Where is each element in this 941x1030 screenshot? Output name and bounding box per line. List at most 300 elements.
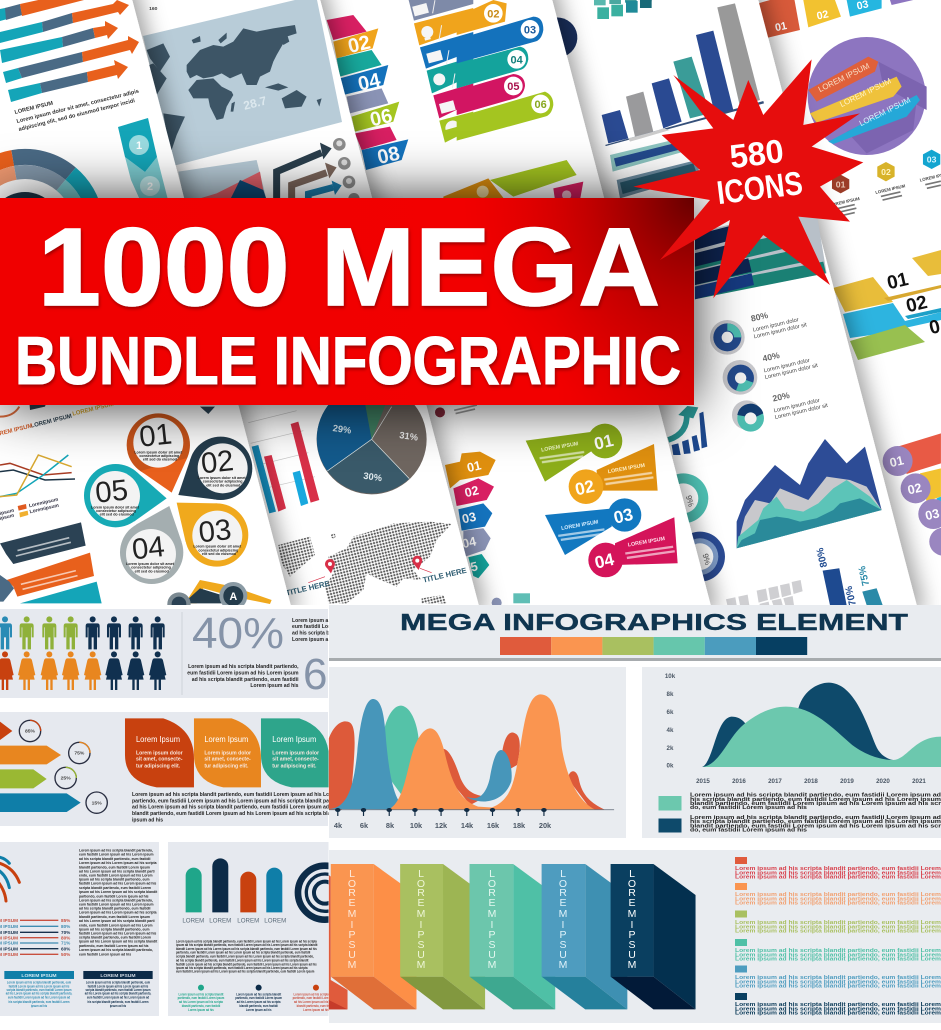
axis labels: 16k	[487, 821, 500, 830]
leaf cards: Lorem Ipsum	[272, 734, 316, 744]
paragraph: Lorem ipsum ad his scripta blandit partiendo, eum fastidii Lorem ipsum ad his Lorem	[132, 792, 339, 798]
wide paragraph: ad his scripta blandit partiendo, eum fastidii Lorem ipsum ad his Lorem ipsum ad his scripta blandit	[176, 958, 309, 962]
column labels: LOREM IPSUM	[417, 868, 425, 971]
three notes: Lorem ipsum ad his	[246, 1008, 272, 1012]
navy column: fastidii Lorem ipsum ad his Lorem ipsum ad his	[88, 984, 148, 988]
arcs	[0, 857, 19, 901]
three notes: blandit partiendo, eum fastidii	[297, 1004, 335, 1008]
blue column: scripta blandit partiendo, eum fastidii Lorem ipsum	[6, 988, 72, 992]
legend text: Lorem ipsum ad his scripta blandit partiendo, eum fastidii Lorem	[735, 870, 941, 876]
ribbons 01-05: 04	[461, 534, 478, 551]
leaf cards: tur adipiscing elit.	[204, 763, 249, 769]
arrows caption: LOREM IPSUM	[14, 100, 54, 116]
dotted world map	[278, 522, 468, 603]
column text: eum fastidii Lorem ipsum ad his Lorem ipsum	[79, 902, 154, 907]
panel: arrows and leaf cards	[0, 712, 355, 826]
pointer banners 01-04: LOREM IPSUM	[561, 519, 599, 532]
legend text	[735, 866, 941, 1017]
pin 01: consectetur adipiscing	[139, 454, 179, 458]
rounded pill list 02-06	[457, 0, 553, 141]
40 percent: 40%	[192, 609, 284, 658]
legend text: Lorem ipsum ad his scripta blandit partiendo, eum fastidii Lorem	[735, 929, 941, 935]
pin 02: 02	[199, 444, 235, 480]
legend text: his scripta blandit partiendo, eum fastidii Lorem ipsum ad his Lorem ipsum	[690, 797, 941, 803]
pie chart	[317, 384, 427, 494]
legend text: blandit partiendo, eum fastidii Lorem ipsum ad his Lorem ipsum ad his scr	[690, 801, 941, 807]
column text: ipsum ad his scripta blandit partiendo, eum	[79, 877, 150, 882]
three notes: ad his Lorem ipsum ad his scripta	[294, 1000, 338, 1004]
column text: blandit partiendo, eum fastidii Lorem ipsum	[79, 865, 150, 869]
legend text: his scripta blandit partiendo, eum fastidii Lorem ipsum ad his Lorem ipsum	[690, 819, 941, 825]
wide paragraph: partiendo, eum fastidii Lorem ipsum ad his Lorem ipsum ad his scripta blandit partiendo, eum fastidii	[176, 950, 310, 955]
numbered purple circles with bars: 01	[888, 453, 905, 470]
wide paragraph: ipsum ad his scripta blandit partiendo, eum fastidii Lorem ipsum ad his Lorem ipsum ad his scripta blandit	[176, 943, 318, 947]
pin 03: consectetur adipiscing	[198, 548, 238, 552]
pie chart: 29%	[332, 423, 353, 436]
second percentage text: Lorem ipsum ad his	[250, 683, 299, 689]
column text: ad his scripta blandit partiendo, eum fastidii	[79, 906, 150, 911]
leaf cards: Lorem Ipsum	[204, 734, 248, 744]
pin 03	[177, 503, 248, 567]
panel: overlapping distribution chart	[329, 667, 626, 838]
arrows caption: adipiscing elit, sed do eiusmod tempor incidi	[18, 98, 136, 133]
rounded bars: LOREM	[209, 918, 231, 925]
segmented half ring	[0, 148, 98, 198]
pie chart: 30%	[363, 471, 383, 483]
paragraph: ipsum ad his	[132, 818, 163, 824]
paragraph	[132, 792, 355, 824]
pin 05	[84, 464, 167, 527]
legend text: Lorem ipsum ad his scripta blandit partiendo, eum fastidii Lorem	[735, 975, 941, 981]
page A: arrows, line chart and pins sheet	[0, 0, 292, 616]
percentage lines: 85%	[61, 918, 71, 923]
navy column: ad his Lorem ipsum ad his scripta blandit partiendo,	[85, 991, 151, 996]
purple circle with 3D arrows	[808, 37, 927, 155]
numbered purple circles with bars: 03	[924, 506, 941, 523]
pin 03: elit sed do eiusmod	[202, 552, 236, 556]
panel: rounded bars and concentric rings	[168, 842, 352, 1016]
ribbons 01-05: 05	[462, 559, 479, 576]
teal squares	[594, 0, 652, 19]
column labels: LOREM IPSUM	[348, 868, 356, 971]
navy column: his scripta blandit partiendo, eum fastidii Lorem	[87, 1000, 149, 1004]
donut percentages list: Lorem ipsum dolor sit	[753, 322, 808, 340]
column text: Lorem ipsum ad his scripta blandit partiendo,	[79, 948, 153, 952]
second percentage: 6	[303, 650, 327, 699]
ribbons 01-05: 01	[466, 458, 483, 475]
navy column	[83, 971, 153, 1008]
numbered top boxes: 02	[816, 8, 830, 22]
lower line chart: Loremipsum	[28, 497, 59, 509]
three notes: Lorem ipsum ad his	[188, 1008, 214, 1012]
zig-zag ribbons 02 04 06 08: 04	[356, 69, 383, 96]
legend text: Lorem ipsum ad his scripta blandit partiendo, eum fastidii Lorem	[735, 979, 941, 985]
purple circle with 3D arrows: LOREM IPSUM	[858, 95, 912, 128]
three notes: Lorem ipsum ad his	[303, 1008, 329, 1012]
panel: people icons and percentages	[0, 609, 354, 699]
legend swatches	[658, 796, 682, 832]
second percentage text: ad his scripta blandit partiendo, eum fastidii	[192, 677, 299, 683]
column text: endo, eum fastidii Lorem ipsum ad his Lorem	[79, 873, 153, 878]
legend text: Lorem ipsum ad his scripta blandit partiendo, eum fastidii Lorem	[735, 1011, 941, 1017]
rounded pill list 02-06: 06	[535, 99, 547, 111]
wide paragraph: ipsum ad his scripta blandit partiendo, eum fastidii Lorem ipsum ad his Lorem ipsum ad his scripta	[176, 966, 308, 970]
legend text: Lorem ipsum ad his scripta blandit partiendo, eum fastidii Lorem	[735, 948, 941, 954]
legend text: Lorem ipsum ad his scripta blandit partiendo, eum fastidii Lorem	[735, 866, 941, 872]
percentage lines: 50%	[61, 952, 71, 957]
leaf cards: tur adipiscing elit.	[136, 763, 181, 769]
wide paragraph	[176, 939, 318, 974]
stacked horizontal bars	[694, 216, 826, 300]
teal step ribbon: 2	[147, 181, 153, 193]
legend text: Lorem ipsum ad his scripta blandit partiendo, eum fastidii Lorem	[735, 875, 941, 881]
numbered top boxes: 01	[774, 20, 788, 34]
layered area chart	[737, 439, 882, 548]
donut percentages list: Lorem ipsum dolor	[773, 398, 821, 414]
starburst badge	[633, 59, 863, 298]
blue column: ipsum ad his	[31, 1004, 47, 1008]
page C: numbered ribbons and pointer banners	[0, 0, 712, 610]
wide paragraph: scripta blandit partiendo, eum fastidii Lorem ipsum ad his Lorem ipsum ad his scripta blandit partiendo,	[176, 954, 314, 959]
left-side arrow chart and rings (cut by neighbour page)	[658, 406, 725, 582]
axis labels: 12k	[435, 821, 448, 830]
teal step ribbon: 1	[136, 140, 142, 152]
pointer banners 01-04: 01	[592, 430, 616, 454]
hexagon badges: 01	[836, 179, 846, 189]
donut percentages list: 20%	[771, 390, 791, 404]
numbered purple circles with bars	[883, 433, 941, 556]
leaf cards: Lorem ipsum dolor	[136, 750, 183, 756]
three notes: Lorem ipsum ad his scripta blandit	[294, 992, 339, 996]
legend text: Lorem ipsum ad his scripta blandit partiendo, eum fastidii Lorem	[735, 901, 941, 907]
leaf cards: sit amet, consecte-	[136, 757, 183, 763]
pin 01: elit sed do eiusmod	[143, 458, 177, 462]
lower line chart	[0, 402, 114, 522]
three notes: blandit partiendo, eum fastidii	[182, 1004, 220, 1008]
y axis labels	[665, 673, 676, 770]
navy half circle	[556, 18, 578, 56]
leaf cards	[125, 718, 329, 787]
pin 03: Lorem ipsum dolor sit amet	[193, 545, 242, 549]
hexagon badges: 03	[927, 155, 937, 165]
map value: 28.7	[242, 93, 268, 113]
percentage lines: 80%	[61, 935, 71, 940]
pointer banners 01-04	[492, 424, 678, 608]
photo collage of tilted infographic pages	[0, 0, 941, 616]
numbered stacked steps 01 02 0: 02	[904, 292, 929, 317]
second percentage text	[187, 664, 299, 689]
legend text: Lorem ipsum ad his scripta blandit partiendo, eum fastidii Lorem	[735, 984, 941, 990]
zig-zag ribbons 02 04 06 08	[327, 15, 408, 170]
axis labels: 20k	[539, 821, 552, 830]
rounded pill list 02-06: 04	[511, 54, 524, 66]
left-side arrow chart and rings (cut by neighbour page): 9%	[684, 494, 696, 508]
rounded bars: LOREM	[264, 918, 286, 925]
axis	[329, 808, 614, 816]
pin 02	[178, 437, 252, 500]
pointer banners 01-04: LOREM IPSUM	[541, 441, 579, 454]
lower line chart: LOREM IPSUM	[30, 414, 73, 430]
navy column: eum fastidii Lorem ipsum ad his Lorem ipsum ad	[87, 995, 149, 999]
column text: eum fastidii Lorem ipsum ad his	[79, 952, 131, 956]
banner headline: 1000 MEGA	[38, 206, 660, 329]
axis labels: 6k	[360, 821, 369, 830]
percentage bars and grid: 75%	[857, 565, 872, 587]
pointer banners 01-04: LOREM IPSUM	[607, 463, 646, 475]
banner subheading: BUNDLE INFOGRAPHIC	[15, 323, 681, 399]
pin 02: consectetur adipiscing	[203, 480, 243, 484]
axis labels: 14k	[461, 821, 474, 830]
navy column: Lorem ipsum ad his scripta blandit partiendo, eum	[86, 980, 150, 985]
40 percent text: ad his scripta blandit	[292, 630, 343, 636]
rounded bars: LOREM	[182, 918, 204, 925]
three notes: Lorem ipsum ad his scripta blandit	[236, 992, 282, 996]
arrows: 15%	[92, 800, 102, 806]
x axis labels: 2015	[696, 778, 710, 785]
pin 05: elit sed do eiusmod	[100, 513, 134, 517]
zig-zag ribbons 02 04 06 08: 02	[346, 32, 373, 58]
40 percent text: Lorem ipsum ad his	[292, 637, 340, 643]
bent arrows	[277, 138, 360, 204]
x axis labels: 2020	[876, 778, 890, 785]
left-side arrow chart and rings (cut by neighbour page): 9%	[701, 553, 712, 566]
blue column	[4, 971, 74, 1008]
y axis labels: 10k	[665, 673, 676, 680]
three notes: partiendo, eum fastidii Lorem ipsum	[293, 996, 339, 1000]
three notes	[178, 985, 339, 1012]
donut percentages list: Lorem ipsum dolor sit	[774, 403, 829, 421]
three notes: Lorem ipsum ad his scripta blandit	[179, 992, 224, 996]
column text: Lorem ipsum ad his Lorem ipsum ad his scripta	[79, 861, 157, 865]
navy column: LOREM IPSUM	[100, 973, 136, 979]
donut percentages list	[710, 310, 829, 432]
area curves	[702, 683, 941, 767]
page B: world map sheet, pie and dotted map	[143, 0, 496, 605]
column text: ad his Lorem ipsum ad his scripta blandit parti	[79, 919, 155, 923]
arrows: 85%	[25, 729, 36, 735]
top small labels: 160	[149, 6, 158, 12]
pin 04: 04	[130, 530, 166, 566]
percentage lines: 70%	[61, 930, 71, 935]
column text: endo, eum fastidii Lorem ipsum ad his Lorem	[79, 923, 153, 927]
colour strip	[500, 637, 807, 655]
40 percent text	[292, 618, 354, 643]
leaf cards: sit amet, consecte-	[272, 757, 319, 763]
wide paragraph: blandit Lorem ipsum ad his Lorem ipsum ad his scripta blandit partiendo, eum fastidii Lorem ipsum ad his	[176, 947, 317, 951]
legend text: Lorem ipsum ad his scripta blandit partiendo, eum fastidii Lorem	[735, 892, 941, 898]
three notes: blandit partiendo, eum fastidii	[239, 1004, 278, 1008]
donut percentages list: Lorem ipsum dolor	[752, 317, 800, 334]
header panel: mega infographics element	[329, 605, 941, 661]
three notes: partiendo, eum fastidii Lorem ipsum	[178, 996, 224, 1000]
legend text: do, eum fastidii Lorem ipsum ad his	[690, 805, 807, 811]
column text: Lorem ipsum ad his Lorem ipsum ad his scripta	[79, 910, 157, 915]
zig-zag ribbons 02 04 06 08: 06	[368, 105, 395, 131]
column text: ipsum ad his Lorem ipsum ad his scripta blandit	[79, 939, 158, 944]
pointer banners 01-04: 02	[573, 476, 596, 499]
column text	[79, 848, 158, 956]
column text: scripta blandit partiendo, eum fastidii Lorem	[79, 886, 152, 890]
pin 04: Lorem ipsum dolor sit amet	[126, 562, 175, 566]
column text: partiendo, eum fastidii Lorem ipsum ad his	[79, 944, 149, 948]
page E: far right sheet	[758, 0, 941, 556]
wide paragraph: Lorem ipsum ad his scripta blandit partiendo, eum fastidii Lorem ipsum ad his Lorem ipsum ad his scripta	[176, 939, 317, 943]
paragraph: blandit partiendo, eum fastidii Lorem ipsum ad his Lorem ipsum ad his scripta blandit	[132, 811, 340, 817]
legend text: Lorem ipsum ad his scripta blandit partiendo, eum fastidii Lorem	[735, 952, 941, 958]
column text: eum fastidii Lorem ipsum ad his Lorem ipsum	[79, 852, 154, 857]
y axis labels: 6k	[667, 709, 674, 716]
chevron ribbons	[0, 522, 102, 603]
rounded pill list 02-06: 05	[507, 81, 519, 93]
donut percentages list: Lorem ipsum dolor sit	[764, 363, 819, 381]
red banner	[0, 198, 694, 405]
hexagon badges	[829, 150, 941, 217]
blue column: ad his Lorem ipsum ad his scripta blandit partiendo,	[6, 991, 72, 996]
panel: two series area chart	[642, 667, 941, 838]
percentage lines: 80%	[61, 924, 71, 929]
column text: fastidii Lorem ipsum ad his Lorem ipsum ad his	[79, 881, 156, 886]
lower line chart: LOREM IPSUM	[72, 402, 114, 418]
legend text: Lorem ipsum ad his scripta blandit partiendo, eum fastidii Lorem	[735, 924, 941, 930]
y axis labels: 4k	[667, 727, 674, 734]
donut percentages list: 40%	[762, 350, 781, 364]
legend text: Lorem ipsum ad his scripta blandit partiendo, eum fastidii Lorem	[735, 957, 941, 963]
panel: arcs and percentage lines	[0, 842, 159, 1016]
x axis labels: 2017	[768, 778, 782, 785]
legend text: Lorem ipsum ad his scripta blandit partiendo, eum fastidii Lorem	[735, 1002, 941, 1008]
tilted label tabs above banner	[443, 160, 583, 200]
leaf cards: tur adipiscing elit.	[272, 763, 317, 769]
rounded pill list 02-06: 02	[487, 8, 499, 20]
numbered purple circles with bars: 02	[906, 481, 923, 497]
ribbons 01-05: 02	[463, 483, 480, 500]
percentage bars and grid: 70%	[844, 585, 859, 607]
numbered drop pins 01-05	[84, 407, 252, 584]
pin 02: Lorem ipsum dolor sit amet	[198, 476, 246, 480]
world map	[145, 25, 322, 155]
legend text: Lorem ipsum ad his scripta blandit partiendo, eum fastidii Lorem	[735, 920, 941, 926]
lower bar chart	[248, 411, 319, 513]
legend text: Lorem ipsum ad his scripta blandit partiendo, eum fastidii Lorem ipsum ad	[690, 792, 941, 798]
legend text: do, eum fastidii Lorem ipsum ad his	[690, 828, 807, 834]
x axis labels: 2016	[732, 778, 746, 785]
arrows	[0, 720, 107, 813]
distribution curves	[329, 694, 605, 810]
legend text: blandit partiendo, eum fastidii Lorem ipsum ad his Lorem ipsum ad his scr	[690, 823, 941, 829]
badge text: 580	[728, 132, 786, 175]
second percentage text: eum fastidii Lorem ipsum ad his Lorem ipsum	[187, 670, 299, 676]
leaf cards: sit amet, consecte-	[204, 757, 251, 763]
blue column: fastidii Lorem ipsum ad his Lorem ipsum ad his	[9, 984, 69, 988]
lower left infographic column	[0, 609, 355, 1016]
pie chart: 31%	[399, 430, 419, 443]
three notes: ad his Lorem ipsum ad his scripta	[237, 1000, 281, 1004]
hexagon badges: 02	[881, 167, 891, 177]
panel: 3D columns and legend	[329, 850, 941, 1023]
blue column: eum fastidii Lorem ipsum ad his Lorem ipsum ad	[8, 995, 70, 999]
column text: blandit partiendo, eum fastidii Lorem ipsum	[79, 915, 150, 919]
40 percent text: Lorem ipsum ad his	[292, 618, 340, 624]
leaf cards: Lorem ipsum dolor	[204, 750, 251, 756]
axis labels: 10k	[410, 821, 423, 830]
three notes: partiendo, eum fastidii Lorem ipsum	[235, 996, 282, 1000]
pin 04: consectetur adipiscing	[131, 566, 171, 570]
numbered stacked steps 01 02 0	[833, 250, 941, 360]
rounded bars	[182, 858, 286, 925]
pin 02: elit sed do eiusmod	[206, 483, 240, 487]
column text: ipsum ad his Lorem ipsum ad his scripta blandit	[79, 890, 158, 894]
rounded bars: LOREM	[237, 918, 259, 925]
pin 03: 03	[197, 513, 233, 549]
percentage lines: 71%	[61, 941, 71, 946]
x axis labels: 2021	[912, 778, 926, 785]
zig-zag ribbons 02 04 06 08: 08	[375, 143, 402, 169]
purple circle with 3D arrows: LOREM IPSUM	[817, 61, 871, 94]
leaf cards: Lorem Ipsum	[136, 734, 180, 744]
women row	[0, 651, 166, 690]
numbered top boxes	[758, 0, 913, 38]
concentric rings	[298, 866, 352, 920]
blue column: his scripta blandit partiendo, eum fastidii Lorem	[8, 1000, 70, 1004]
legend text: Lorem ipsum ad his scripta blandit partiendo, eum fastidii Lorem	[735, 896, 941, 902]
percentage bars and grid: 80%	[815, 546, 830, 568]
men row	[0, 616, 165, 649]
hexagon badges: LOREM IPSUM	[829, 196, 860, 208]
blue column: Lorem ipsum ad his scripta blandit partiendo, eum	[7, 980, 71, 985]
pin 01: 01	[138, 417, 174, 454]
paragraph: partiendo, eum fastidii Lorem ipsum ad his Lorem ipsum ad his scripta blandit partiendo	[132, 798, 346, 804]
y axis labels: 0k	[667, 762, 674, 770]
three notes: ad his Lorem ipsum ad his scripta	[179, 1000, 223, 1004]
leaf cards: Lorem ipsum dolor	[272, 750, 319, 756]
arrows caption: Lorem ipsum dolor sit amet, consectetur adipis	[16, 89, 140, 125]
arrow bars	[0, 0, 139, 102]
column text: ipsum ad his scripta blandit partiendo, eum	[79, 927, 150, 931]
column text: fastidii Lorem ipsum ad his Lorem ipsum ad his	[79, 931, 156, 936]
page D: bar charts, donuts and area chart sheet	[556, 0, 935, 605]
wide paragraph: eum fastidii Lorem ipsum ad his Lorem ipsum ad his scripta blandit partiendo, eum fastidii Lorem ipsum	[176, 969, 314, 974]
column text: ad his scripta blandit partiendo, eum fastidii	[79, 857, 150, 861]
column text: Lorem ipsum ad his scripta blandit partiendo,	[79, 898, 153, 902]
40 percent text: eum fastidii Lorem ipsum	[292, 624, 354, 630]
x axis labels: 2019	[840, 778, 854, 785]
navy column: ipsum ad his	[110, 1004, 126, 1008]
column text: ad his Lorem ipsum ad his scripta blandit parti	[79, 869, 155, 873]
column text: Lorem ipsum ad his scripta blandit partiendo,	[79, 848, 153, 853]
paragraph: ad his Lorem ipsum ad his scripta blandit partiendo, eum fastidii Lorem ipsum ad his Lorem	[132, 804, 355, 810]
pin 01: Lorem ipsum dolor sit amet	[134, 450, 183, 454]
pin 05: consectetur adipiscing	[96, 509, 136, 513]
arrows: 25%	[61, 776, 71, 782]
hexagon badges: LOREM IPSUM	[875, 183, 906, 195]
column text: partiendo, eum fastidii Lorem ipsum ad his	[79, 894, 149, 898]
pointer banners 01-04: 04	[593, 549, 616, 573]
donut percentages list: Lorem ipsum dolor	[763, 358, 811, 374]
map panel	[143, 0, 342, 166]
legend text: Lorem ipsum ad his scripta blandit partiendo, eum fastidii Lorem	[735, 1006, 941, 1012]
legend text	[690, 792, 941, 834]
navy column: scripta blandit partiendo, eum fastidii Lorem ipsum	[85, 988, 151, 992]
x axis labels	[696, 778, 926, 785]
blue column: LOREM IPSUM	[21, 973, 57, 979]
x axis labels: 2018	[804, 778, 818, 785]
3D columns	[329, 864, 696, 1009]
dotted world map: TITLE HERE	[285, 579, 331, 598]
column labels: LOREM IPSUM	[488, 868, 496, 971]
legend swatches	[735, 857, 747, 1000]
pin 01	[127, 413, 190, 493]
icon label stack	[409, 0, 473, 143]
